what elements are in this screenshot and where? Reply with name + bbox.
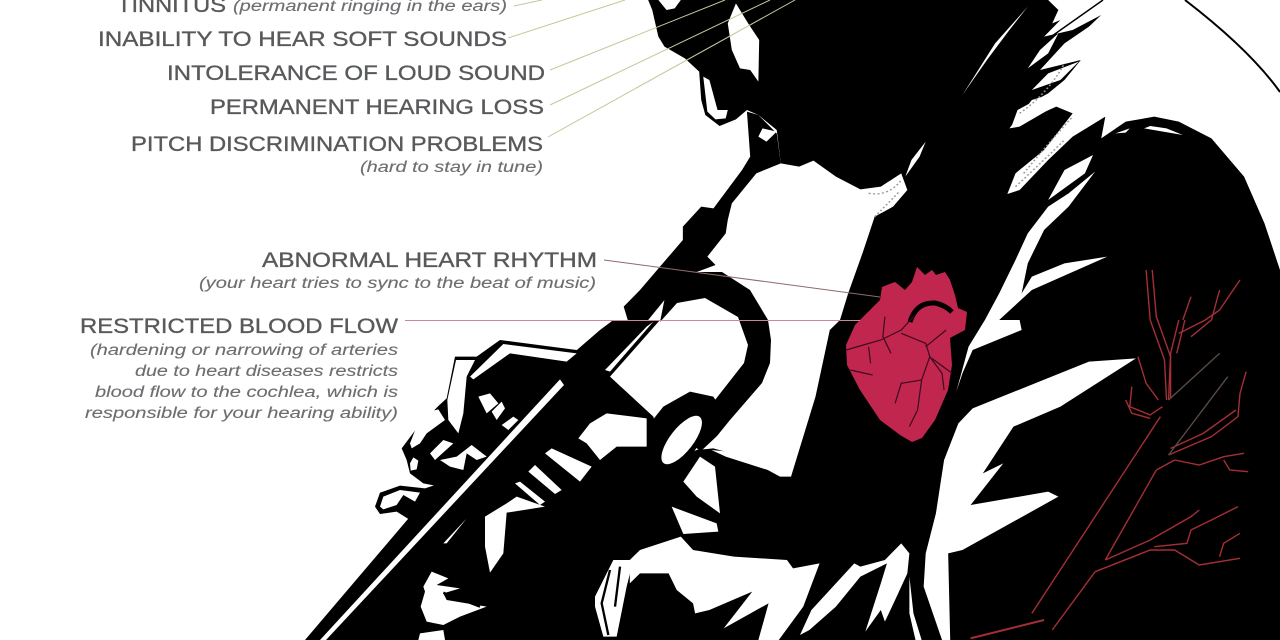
lower valve ring — [647, 392, 720, 477]
symptom: pitch: (hard to stay in tune) — [360, 159, 543, 176]
head, neck and torso silhouette — [648, 0, 1280, 640]
white highlights on face — [658, 0, 1183, 392]
symptom: abnormal heart rhythm — [199, 249, 597, 292]
tie detail lines — [443, 567, 620, 635]
forearm, hand mass, trumpet body — [305, 320, 793, 640]
leader lines to heart — [405, 260, 880, 320]
bell highlight and lower white regions — [630, 358, 1136, 640]
illustration: trumpet player silhouette — [305, 0, 1280, 640]
symptom: restricted blood flow: responsible for your hearing ability) — [85, 405, 398, 422]
symptom: abnormal heart rhythm: (your heart tries to sync to the beat of music) — [199, 275, 596, 292]
trumpet lead pipe and mouthpiece — [624, 112, 781, 320]
white details of hand, valves and bell — [320, 322, 720, 640]
symptom: restricted blood flow: (hardening or narrowing of arteries — [90, 342, 398, 359]
leader lines to ear symptoms — [508, 0, 795, 137]
symptom: restricted blood flow: RESTRICTED BLOOD FLOW — [80, 315, 398, 338]
thumb hook — [375, 483, 440, 520]
arteries on the back and arm — [971, 270, 1248, 638]
symptom: hearing loss: PERMANENT HEARING LOSS — [210, 96, 544, 119]
symptom: abnormal heart rhythm: ABNORMAL HEART RHYTHM — [262, 249, 597, 272]
texture under the chin and along the hair — [869, 63, 1073, 217]
symptom: restricted blood flow — [80, 315, 398, 422]
thin hair strand at top — [1052, 0, 1103, 36]
left hand outline — [402, 340, 600, 487]
symptom: restricted blood flow: blood flow to the cochlea, which is — [95, 384, 398, 401]
symptom: loud sound: INTOLERANCE OF LOUD SOUND — [167, 62, 545, 85]
symptom: pitch: PITCH DISCRIMINATION PROBLEMS — [131, 133, 543, 156]
heart — [846, 267, 967, 442]
symptom: restricted blood flow: due to heart diseases restricts — [135, 363, 398, 380]
symptom: tinnitus — [117, 0, 507, 17]
trumpet tuning slide arc — [660, 272, 771, 452]
body outline arc at top right — [1185, 0, 1280, 92]
symptom: soft sounds: INABILITY TO HEAR SOFT SOUNDS — [98, 28, 507, 51]
symptom: pitch — [131, 133, 543, 176]
